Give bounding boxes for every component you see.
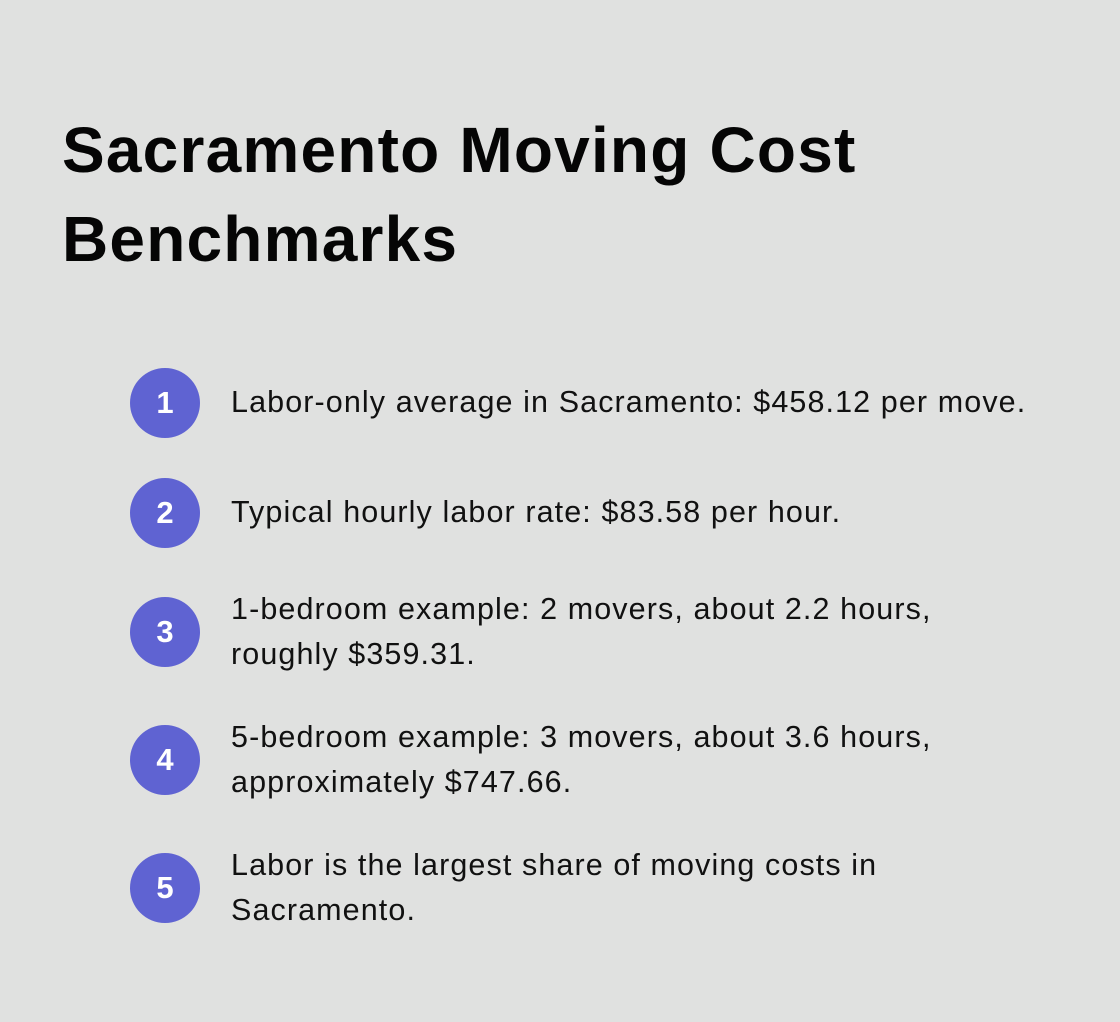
icon: number 1 [130,368,200,438]
text 2: Typical hourly labor rate: $83.58 per hour. [231,495,841,529]
title: Benchmarks [62,203,458,275]
item 5 [130,848,877,927]
icon: number 1: 1 [156,385,174,420]
text 3 [231,592,932,671]
text 5 [231,848,877,927]
item 3 [130,592,932,671]
icon: number 2: 2 [156,495,174,530]
icon: number 4: 4 [156,742,174,777]
icon: number 5 [130,853,200,923]
text 4: approximately $747.66. [231,765,572,799]
text 3: roughly $359.31. [231,637,476,671]
title [62,114,857,275]
item 1 [130,368,1026,438]
item 2 [130,478,841,548]
icon: number 3 [130,597,200,667]
icon: number 3: 3 [156,614,174,649]
text 5: Sacramento. [231,893,416,927]
title: Sacramento Moving Cost [62,114,857,186]
text 5: Labor is the largest share of moving costs in [231,848,877,882]
text 4: 5-bedroom example: 3 movers, about 3.6 hours, [231,720,932,754]
text 4 [231,720,932,799]
text 1: Labor-only average in Sacramento: $458.12 per move. [231,385,1026,419]
text 3: 1-bedroom example: 2 movers, about 2.2 hours, [231,592,932,626]
icon: number 2 [130,478,200,548]
item 4 [130,720,932,799]
icon: number 4 [130,725,200,795]
icon: number 5: 5 [156,870,174,905]
